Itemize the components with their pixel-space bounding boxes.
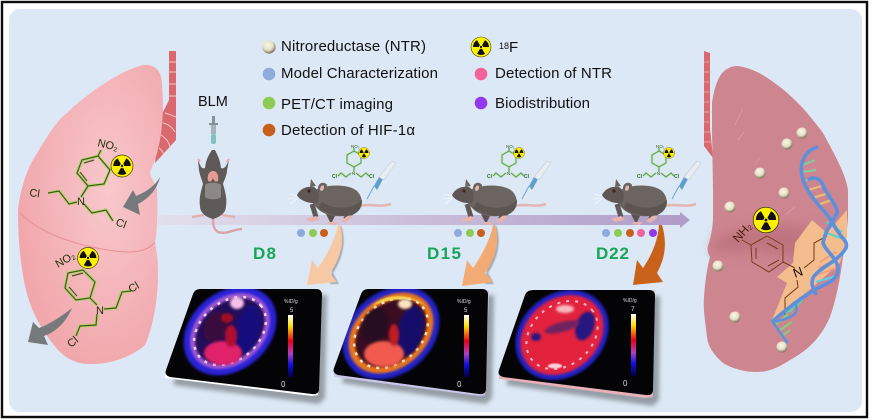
- left lung: [18, 51, 176, 364]
- trachea right: [704, 51, 713, 158]
- dots: D15: [454, 229, 485, 237]
- PET scan D8: 0: [281, 380, 286, 389]
- legend item: PET/CT imaging: PET/CT imaging: [281, 96, 393, 113]
- trachea left: [155, 51, 176, 163]
- legend item: Biodistribution: Biodistribution: [495, 95, 590, 112]
- molecule: upper left probe: Cl: [29, 187, 41, 200]
- legend item: 18F: 18: [499, 41, 509, 51]
- molecule: lower left probe: Cl: [65, 334, 81, 350]
- molecule: lower left probe: N: [96, 305, 104, 317]
- molecule: upper left probe: NO₂: [96, 137, 119, 154]
- molecule: reduced probe: [730, 219, 827, 317]
- molecule: lower left probe: Cl: [126, 280, 141, 296]
- PET scan D15: [334, 289, 496, 406]
- PET scan D22: 7: [631, 306, 635, 313]
- axis arrow: [158, 212, 690, 228]
- molecule: reduced probe: N: [791, 264, 805, 281]
- legend item: Detection of NTR: Detection of NTR: [495, 65, 612, 82]
- dots: D22: [602, 229, 657, 237]
- PET scan D8: [165, 289, 330, 406]
- molecule: upper left probe: Cl: [114, 217, 128, 231]
- legend item: Detection of HIF-1α: Detection of HIF-1α: [281, 122, 415, 139]
- PET scan D8: %ID/g: [284, 299, 298, 305]
- timepoint D8 mouse and probe: [288, 144, 396, 225]
- timepoint D22 mouse and probe: [593, 144, 701, 225]
- PET scan D22: [498, 290, 662, 408]
- legend item: 18F: F: [509, 39, 518, 56]
- molecule: upper left probe: N: [77, 196, 85, 208]
- dots: D8: [297, 229, 328, 237]
- PET scan D8: 5: [290, 308, 294, 314]
- molecule: lower left probe: [54, 248, 141, 350]
- icon: radiation on lung: [753, 207, 779, 233]
- label: D22: D22: [596, 244, 629, 263]
- right lung: [704, 51, 848, 372]
- legend item: Model Characterization: Model Characterization: [281, 65, 438, 82]
- molecule: reduced probe: NH₂: [730, 219, 755, 245]
- molecule: upper left probe: [29, 137, 133, 231]
- label: BLM: BLM: [198, 94, 228, 110]
- label: D8: D8: [253, 244, 276, 263]
- legend item: Nitroreductase: Nitroreductase (NTR): [281, 38, 426, 55]
- icon: mouse top view: [192, 150, 242, 233]
- arrow: grey upper: [123, 177, 160, 215]
- PET scan D22: 0: [623, 379, 628, 388]
- arrow: D15 to scan: [462, 225, 499, 286]
- PET scan D22: %ID/g: [623, 298, 637, 304]
- molecule: lower left probe: NO₂: [54, 250, 77, 271]
- legend: [262, 37, 612, 139]
- arrow: D8 to scan: [307, 225, 344, 285]
- burst: lightning glow: [772, 210, 847, 320]
- timepoint D15 mouse and probe: [443, 144, 551, 225]
- icon: BLM syringe: [209, 116, 218, 144]
- label: D15: D15: [427, 244, 461, 263]
- PET scan D15: 0: [457, 380, 462, 389]
- arrow: grey lower: [28, 308, 72, 345]
- DNA helix: [772, 147, 846, 346]
- PET scan D15: %ID/g: [457, 299, 471, 305]
- NTR spheres: [712, 128, 808, 352]
- PET scan D15: 5: [464, 308, 468, 314]
- legend item: 18F: [471, 37, 518, 57]
- arrow: D22 to scan: [633, 225, 665, 285]
